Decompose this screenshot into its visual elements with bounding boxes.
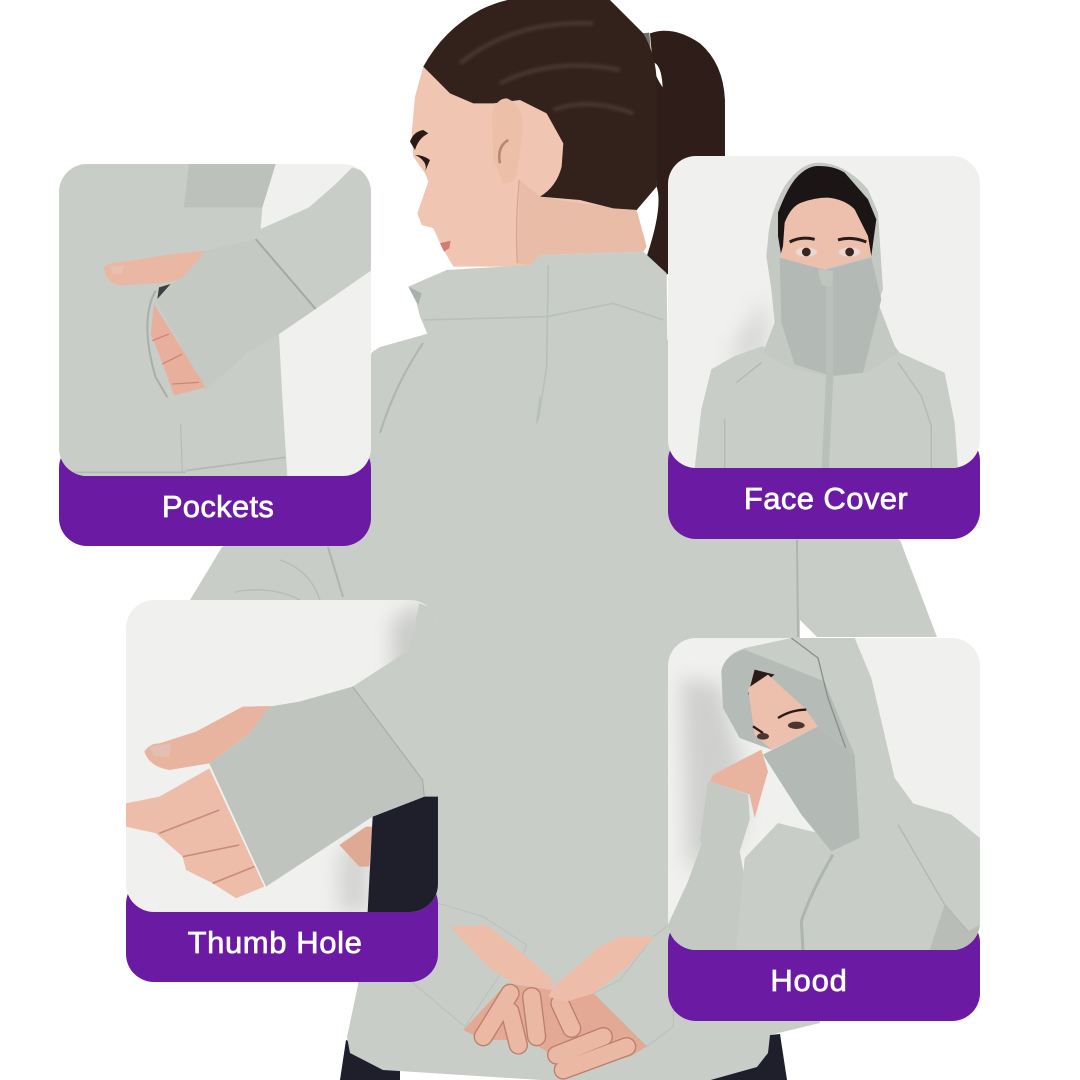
thumb — [104, 251, 206, 286]
photo: hood up with mask — [668, 638, 980, 950]
background shadow — [339, 833, 369, 912]
finger outlines — [483, 993, 627, 1070]
eyebrow and eye — [410, 130, 428, 150]
jacket seams and folds — [328, 343, 798, 637]
hand — [126, 768, 264, 898]
hair — [778, 166, 876, 256]
sleeve cuff — [279, 310, 314, 334]
left hand — [450, 925, 553, 990]
face — [748, 675, 818, 750]
head: face, neck and ear — [410, 0, 657, 267]
zipper — [801, 855, 833, 950]
panel: pockets — [59, 164, 371, 546]
hem — [59, 457, 286, 472]
label: Face Cover — [744, 481, 908, 516]
label bar — [59, 440, 371, 546]
sleeve — [668, 806, 750, 950]
jacket body and sleeves — [190, 333, 937, 1080]
fingers inside pocket — [151, 304, 206, 396]
eyes — [796, 247, 817, 257]
eyebrows — [790, 238, 866, 242]
label: Thumb Hole — [188, 925, 362, 960]
thumb — [144, 706, 271, 770]
thumb hole cuffs and clasped hands — [413, 903, 673, 1070]
leggings — [340, 1034, 787, 1080]
hair — [748, 670, 775, 695]
wall shadow — [681, 678, 745, 871]
hair band — [642, 33, 652, 62]
hair highlights — [460, 23, 633, 113]
side panel — [930, 905, 980, 950]
ponytail — [642, 31, 725, 277]
hood inner — [721, 650, 855, 755]
leggings — [368, 793, 438, 912]
label bar — [668, 433, 980, 539]
ear — [492, 98, 523, 184]
label bar — [668, 915, 980, 1021]
seams — [725, 363, 931, 468]
hand at mask — [710, 750, 768, 818]
mesh panel — [184, 164, 276, 207]
body — [695, 346, 958, 468]
hood — [721, 638, 913, 840]
panel: hood — [668, 638, 980, 1021]
photo: thumb through sleeve hole — [126, 600, 438, 912]
upper sleeve — [353, 603, 438, 797]
palm base — [463, 983, 647, 1067]
fingers — [483, 993, 627, 1070]
neck shadow — [517, 180, 647, 265]
main figure: woman seen from behind wearing hoodie — [190, 0, 937, 1080]
body — [736, 803, 980, 950]
panel: thumb hole — [126, 600, 438, 982]
label bar — [126, 876, 438, 982]
label: Pockets — [162, 489, 274, 524]
wall shadow — [730, 308, 772, 357]
second hand behind — [339, 827, 373, 867]
mask — [763, 726, 860, 851]
face — [780, 198, 871, 269]
mask — [780, 258, 881, 376]
right cuff — [593, 922, 673, 1047]
left cuff — [413, 903, 527, 1027]
label: Hood — [770, 963, 848, 998]
pocket opening — [157, 284, 171, 299]
hood — [408, 252, 668, 435]
panel: face cover — [668, 156, 980, 539]
cuff — [209, 687, 424, 887]
gap under hair band — [652, 62, 663, 87]
zipper — [825, 273, 830, 468]
right hand — [548, 937, 655, 1002]
lips — [440, 241, 451, 252]
hair — [423, 0, 657, 210]
photo: hand in pocket — [59, 164, 371, 476]
eyebrow and eyes — [753, 710, 806, 733]
photo: raised face cover — [668, 156, 980, 468]
hood — [763, 163, 900, 378]
